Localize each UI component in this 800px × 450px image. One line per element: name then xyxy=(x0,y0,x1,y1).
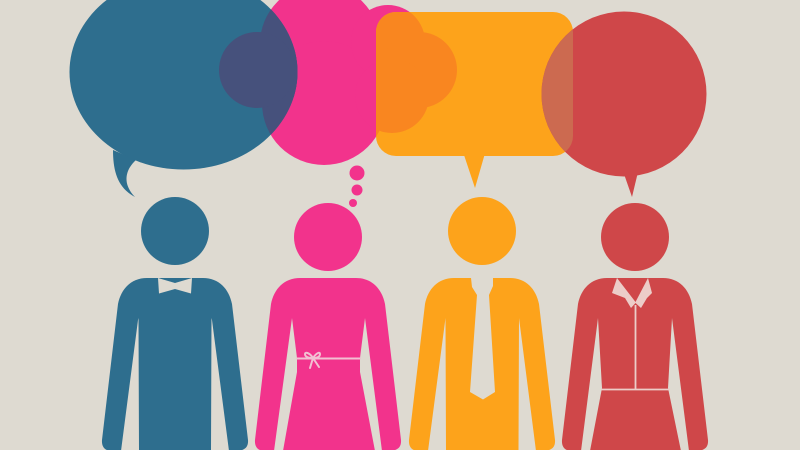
person: blue man with bow tie xyxy=(102,197,248,450)
body xyxy=(409,278,555,450)
overlap: blue bubble and pink cloud xyxy=(219,10,298,135)
head xyxy=(294,203,362,271)
head xyxy=(448,197,516,265)
speech bubble: red circle xyxy=(542,12,706,197)
jacket seams xyxy=(601,305,670,390)
jacket, skirt and arms xyxy=(562,278,708,450)
overlap: red circle and orange bubble xyxy=(542,30,573,152)
person: pink woman with dress xyxy=(255,203,401,450)
person: red woman in suit xyxy=(562,203,708,450)
thought bubble: pink cloud xyxy=(219,0,457,207)
speech bubble: orange rectangle xyxy=(376,12,573,188)
head xyxy=(141,197,209,265)
person: orange man with tie xyxy=(409,197,555,450)
bow tie xyxy=(158,278,192,294)
dress and arms xyxy=(255,278,401,450)
illustration: four people with speech bubbles xyxy=(70,0,708,450)
body xyxy=(102,278,248,450)
necktie xyxy=(470,278,495,400)
belt and bow xyxy=(297,353,360,368)
overlap: pink cloud and orange bubble xyxy=(376,12,457,136)
speech bubble: blue oval xyxy=(70,0,298,197)
collar xyxy=(612,278,652,308)
head xyxy=(601,203,669,271)
